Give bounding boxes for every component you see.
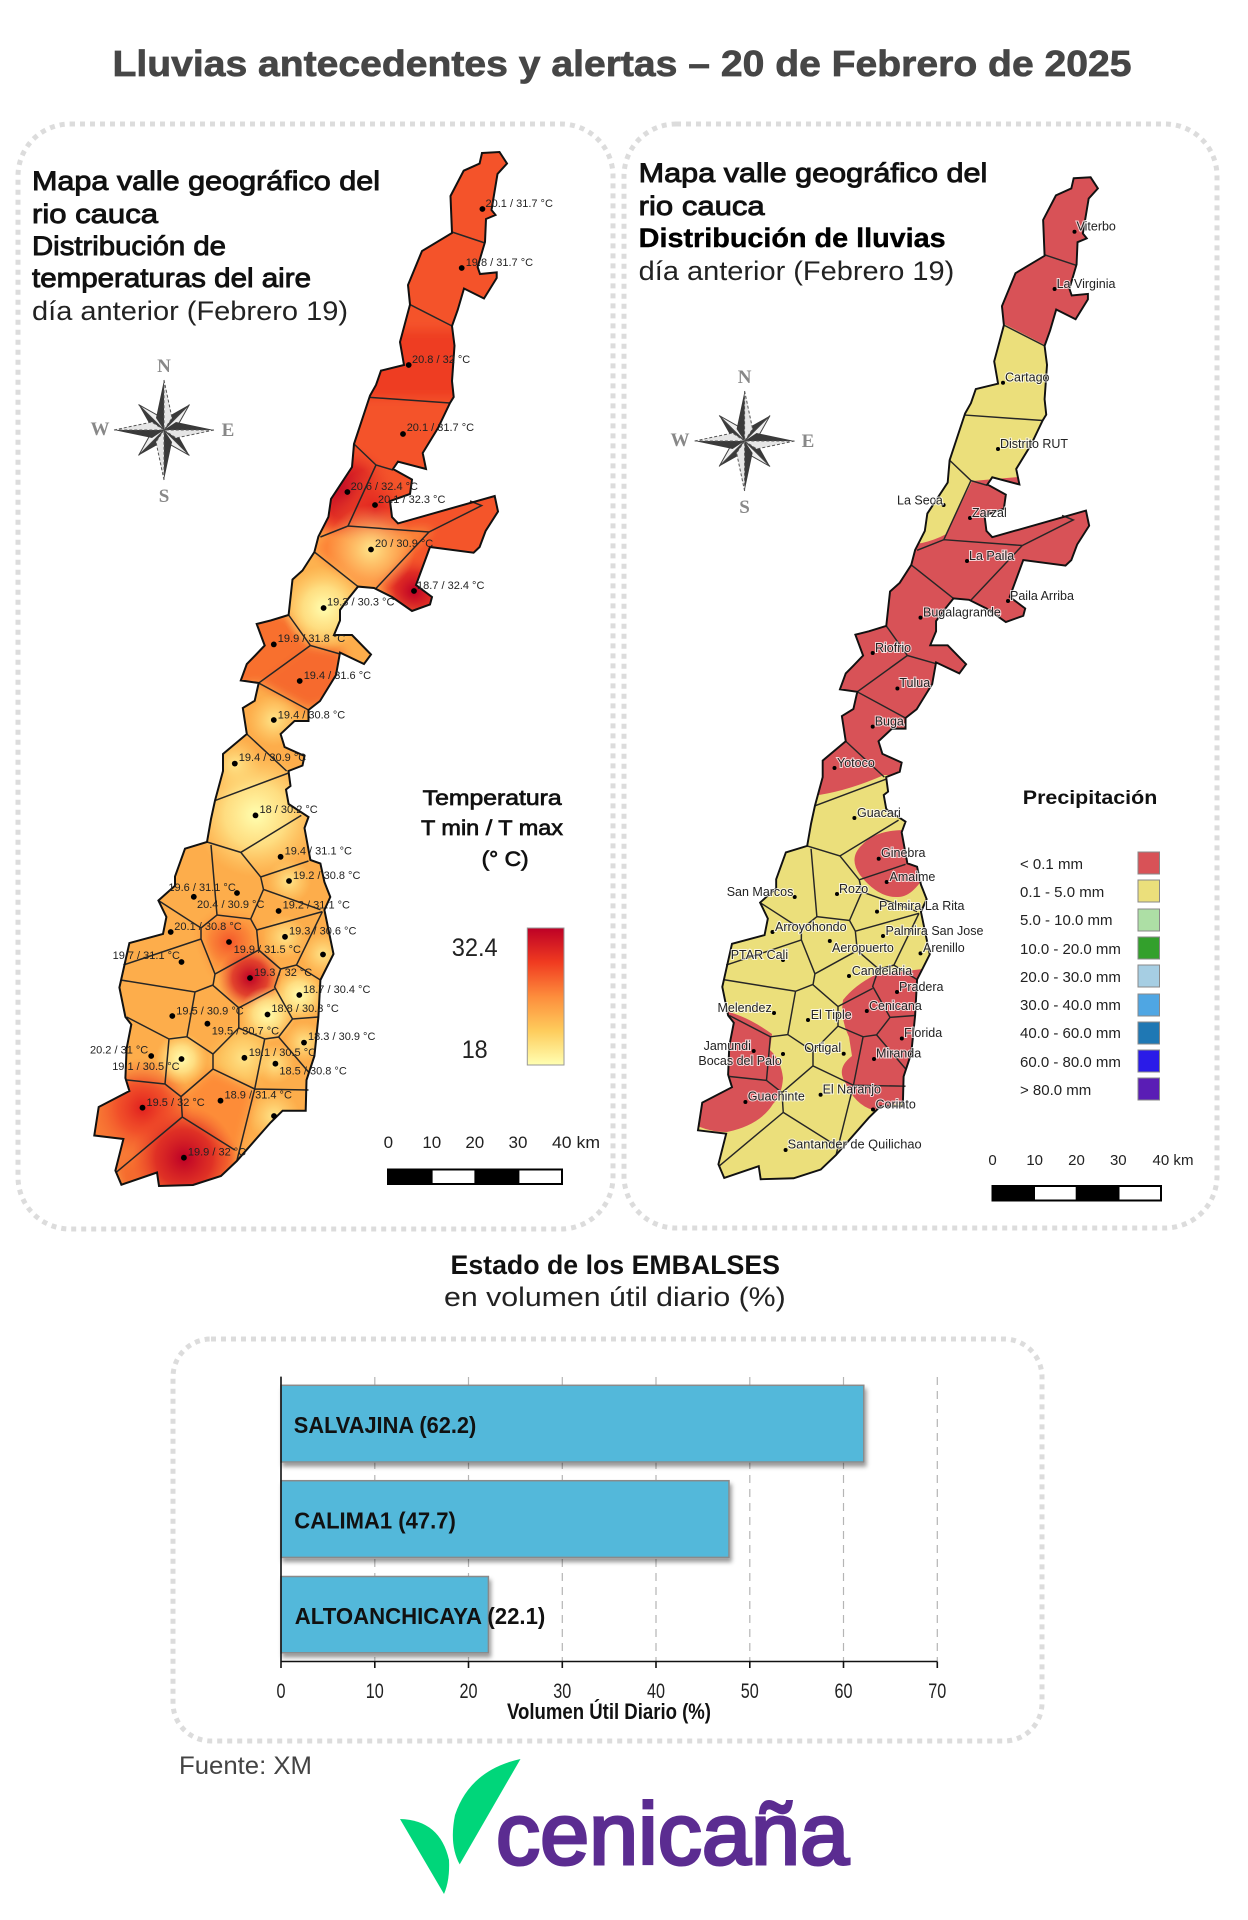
- precipitation legend: < 0.1 mm: [1020, 856, 1083, 873]
- station dots and names: Jamundi: [704, 1039, 751, 1053]
- station dots and temperature labels: 19.5 / 32 °C: [146, 1097, 205, 1109]
- axes: [281, 1377, 937, 1668]
- station dots and temperature labels: 19.3 / 32 °C: [254, 967, 312, 979]
- scale bar: rainfall map: 0: [988, 1152, 997, 1169]
- logo: Cenicaña: cenicaña: [496, 1786, 850, 1883]
- station dots and names: Corinto: [876, 1097, 916, 1111]
- bar: Calima1: CALIMA1 (47.7): [294, 1507, 456, 1533]
- axis title: Volumen Útil Diario (%): [507, 1699, 711, 1724]
- precipitation legend: 0.1 - 5.0 mm: [1020, 884, 1104, 901]
- scale bar: temperature map: 30: [509, 1133, 527, 1152]
- station dots and temperature labels: 19.1 / 30.5 °C: [249, 1047, 316, 1059]
- heading: reservoirs: Estado de los EMBALSES: [450, 1250, 780, 1280]
- station dots and temperature labels: 19.7 / 31.1 °C: [113, 950, 180, 962]
- station dots and temperature labels: 19.4 / 30.8 °C: [278, 709, 345, 721]
- station dots and names: Bugalagrande: [923, 606, 1001, 620]
- scale bar: temperature map: 20: [465, 1133, 484, 1152]
- station dots and names: San Marcos: [727, 885, 793, 899]
- station dots and names: PTAR Cali: [731, 948, 788, 962]
- station dots and names: Ortigal: [804, 1041, 841, 1055]
- station dots and names: Miranda: [876, 1047, 921, 1061]
- station dots and temperature labels: 20 / 30.9 °C: [375, 538, 433, 550]
- icon: compass rose: N: [738, 367, 752, 388]
- scale bar: rainfall map: 30: [1110, 1152, 1127, 1169]
- station dots and names: La Paila: [969, 549, 1014, 563]
- scale bar: rainfall map: 10: [1026, 1152, 1043, 1169]
- station dots and names: Palmira La Rita: [879, 899, 964, 913]
- icon: compass rose: W: [670, 430, 690, 451]
- precipitation legend: 20.0 - 30.0 mm: [1020, 969, 1121, 986]
- station dots and names: Santander de Quilichao: [788, 1138, 922, 1152]
- precipitation legend: 10.0 - 20.0 mm: [1020, 941, 1121, 958]
- temperature legend: 32.4: [452, 934, 498, 962]
- station dots and temperature labels: 19.6 / 31.1 °C: [168, 882, 236, 894]
- temperature map: [93, 151, 508, 1187]
- station dots and temperature labels: 19.5 / 30.7 °C: [212, 1026, 279, 1038]
- station dots and names: Bocas del Palo: [698, 1054, 782, 1068]
- station dots and names: El Tiple: [811, 1008, 852, 1022]
- station dots and temperature labels: 20.6 / 32.4 °C: [351, 481, 418, 493]
- icon: compass rose: E: [222, 420, 234, 441]
- axis tick labels: 0: [276, 1680, 286, 1703]
- axis tick labels: 70: [928, 1680, 946, 1703]
- station dots and names: Palmira San Jose: [886, 924, 984, 938]
- station dots and temperature labels: 18.3 / 30.9 °C: [308, 1031, 375, 1043]
- precipitation legend: 60.0 - 80.0 mm: [1020, 1054, 1121, 1071]
- station dots and names: Candelaria: [852, 964, 912, 978]
- station dots and names: Amaime: [890, 870, 935, 884]
- station dots and names: La Seca: [897, 494, 943, 508]
- panel: temperature map: [18, 124, 613, 1229]
- axis tick labels: 40: [647, 1680, 665, 1703]
- station dots and names: Aeropuerto: [832, 941, 894, 955]
- heading: rainfall map: Mapa valle geográfico del: [639, 158, 987, 188]
- station dots and names: [698, 219, 1116, 1152]
- bar: Altoanchicaya: ALTOANCHICAYA (22.1): [295, 1603, 545, 1629]
- station dots and names: Distrito RUT: [1000, 437, 1068, 451]
- temperature legend: 18: [462, 1036, 488, 1064]
- heading: temperature map: Distribución de: [32, 231, 226, 261]
- bar: Calima1: [281, 1481, 729, 1557]
- station dots and names: Guachinte: [748, 1090, 805, 1104]
- station dots and temperature labels: 20.1 / 31.7 °C: [486, 198, 553, 210]
- scale bar: rainfall map: 40 km: [1152, 1152, 1194, 1169]
- logo: Cenicaña: [400, 1759, 850, 1894]
- station dots and temperature labels: 20.2 / 31 °C: [90, 1045, 148, 1057]
- icon: compass rose: W: [90, 419, 110, 440]
- station dots and names: Tulua: [899, 676, 930, 690]
- title: Lluvias antecedentes y alertas – 20 de Febrero de 2025: [112, 43, 1132, 84]
- station dots and temperature labels: 19.5 / 30.9 °C: [176, 1005, 244, 1017]
- station dots and temperature labels: 18.7 / 30.4 °C: [303, 984, 370, 996]
- temperature legend: Temperatura: [423, 787, 562, 810]
- scale bar: temperature map: 0: [384, 1133, 393, 1152]
- scale bar: temperature map: [384, 1133, 600, 1184]
- heading: reservoirs: en volumen útil diario (%): [444, 1282, 786, 1312]
- station dots and names: El Naranjo: [823, 1083, 881, 1097]
- station dots and temperature labels: [90, 198, 553, 1161]
- station dots and names: Arenillo: [923, 941, 965, 955]
- heading: rainfall map: [639, 158, 987, 286]
- station dots and names: Ginebra: [881, 846, 926, 860]
- rainfall map: [696, 176, 1099, 1180]
- precipitation legend: 30.0 - 40.0 mm: [1020, 997, 1121, 1014]
- station dots and temperature labels: 19.3 / 30.3 °C: [327, 597, 394, 609]
- heading: rainfall map: rio cauca: [639, 191, 766, 221]
- station dots and temperature labels: 19.9 / 32 °C: [188, 1147, 246, 1159]
- station dots and temperature labels: 18.9 / 31.4 °C: [224, 1089, 292, 1101]
- station dots and temperature labels: 20.1 / 32.3 °C: [378, 494, 445, 506]
- station dots and names: Riofrio: [875, 641, 911, 655]
- station dots and temperature labels: 19.3 / 30.6 °C: [289, 926, 356, 938]
- panel: reservoirs chart: [173, 1339, 1042, 1741]
- icon: compass rose: [670, 367, 814, 518]
- heading: temperature map: temperaturas del aire: [32, 263, 311, 293]
- bar: Altoanchicaya: [281, 1576, 545, 1653]
- bar: Salvajina: SALVAJINA (62.2): [294, 1412, 476, 1438]
- station dots and names: Cartago: [1005, 371, 1050, 385]
- station dots and temperature labels: 18.8 / 30.3 °C: [271, 1003, 339, 1015]
- station dots and names: Florida: [904, 1026, 942, 1040]
- heading: temperature map: Mapa valle geográfico del: [32, 166, 380, 196]
- axis tick labels: [276, 1680, 946, 1703]
- temperature legend: [421, 787, 564, 1065]
- scale bar: rainfall map: [988, 1152, 1194, 1200]
- station dots and names: La Virginia: [1057, 277, 1115, 291]
- scale bar: temperature map: 40 km: [552, 1133, 600, 1152]
- precipitation legend: 5.0 - 10.0 mm: [1020, 912, 1113, 929]
- station dots and temperature labels: 19.4 / 31.6 °C: [304, 670, 371, 682]
- panel: rainfall map: [624, 124, 1217, 1228]
- heading: rainfall map: día anterior (Febrero 19): [639, 256, 954, 286]
- station dots and temperature labels: 19.9 / 31.5 °C: [234, 944, 301, 956]
- axis tick labels: 20: [460, 1680, 478, 1703]
- scale bar: rainfall map: 20: [1068, 1152, 1085, 1169]
- precipitation legend: [1020, 788, 1160, 1100]
- temperature legend: (° C): [482, 848, 529, 871]
- station dots and temperature labels: 20.1 / 30.8 °C: [174, 921, 242, 933]
- station dots and names: Pradera: [899, 980, 944, 994]
- station dots and names: Zarzal: [972, 506, 1007, 520]
- source note: Fuente: XM: [179, 1752, 312, 1780]
- temperature legend: T min / T max: [421, 817, 564, 840]
- station dots and temperature labels: 19.9 / 31.8 °C: [278, 633, 345, 645]
- station dots and names: Paila Arriba: [1010, 589, 1074, 603]
- heading: temperature map: rio cauca: [32, 199, 159, 229]
- station dots and names: Cenicana: [869, 999, 922, 1013]
- station dots and temperature labels: 18.5 / 30.8 °C: [279, 1066, 347, 1078]
- station dots and temperature labels: 19.1 / 30.5 °C: [112, 1061, 180, 1073]
- icon: compass rose: N: [157, 356, 171, 377]
- station dots and names: Yotoco: [837, 756, 875, 770]
- station dots and temperature labels: 20.8 / 32 °C: [412, 354, 470, 366]
- icon: compass rose: [90, 356, 234, 507]
- heading: reservoirs: [444, 1250, 786, 1312]
- station dots and temperature labels: 19.8 / 31.7 °C: [466, 257, 533, 269]
- station dots and temperature labels: 18 / 30.2 °C: [260, 804, 318, 816]
- station dots and names: Rozo: [839, 882, 868, 896]
- station dots and names: Guacari: [857, 806, 901, 820]
- station dots and temperature labels: 20.4 / 30.9 °C: [197, 899, 264, 911]
- scale bar: temperature map: 10: [422, 1133, 441, 1152]
- heading: temperature map: [32, 166, 380, 326]
- station dots and temperature labels: 19.4 / 30.9 °C: [239, 752, 306, 764]
- station dots and temperature labels: 19.2 / 31.1 °C: [283, 900, 350, 912]
- heading: temperature map: día anterior (Febrero 19): [32, 296, 348, 326]
- heading: rainfall map: Distribución de lluvias: [639, 223, 946, 253]
- axis tick labels: 50: [741, 1680, 759, 1703]
- bar: Salvajina: [281, 1385, 864, 1462]
- station dots and names: Arroyohondo: [775, 920, 847, 934]
- station dots and names: Viterbo: [1076, 219, 1116, 233]
- station dots and temperature labels: 19.2 / 30.8 °C: [293, 870, 360, 882]
- icon: compass rose: S: [159, 486, 169, 507]
- station dots and temperature labels: 20.1 / 31.7 °C: [407, 422, 474, 434]
- precipitation legend: 40.0 - 60.0 mm: [1020, 1025, 1121, 1042]
- icon: compass rose: S: [739, 497, 750, 518]
- station dots and temperature labels: 18.7 / 32.4 °C: [417, 580, 484, 592]
- precipitation legend: Precipitación: [1023, 788, 1157, 809]
- station dots and names: Buga: [875, 714, 904, 728]
- station dots and names: Melendez: [718, 1001, 772, 1015]
- axis tick labels: 60: [834, 1680, 852, 1703]
- station dots and temperature labels: 19.4 / 31.1 °C: [285, 846, 352, 858]
- precipitation legend: > 80.0 mm: [1020, 1082, 1091, 1099]
- icon: compass rose: E: [802, 431, 814, 452]
- axis tick labels: 30: [553, 1680, 571, 1703]
- axis tick labels: 10: [366, 1680, 384, 1703]
